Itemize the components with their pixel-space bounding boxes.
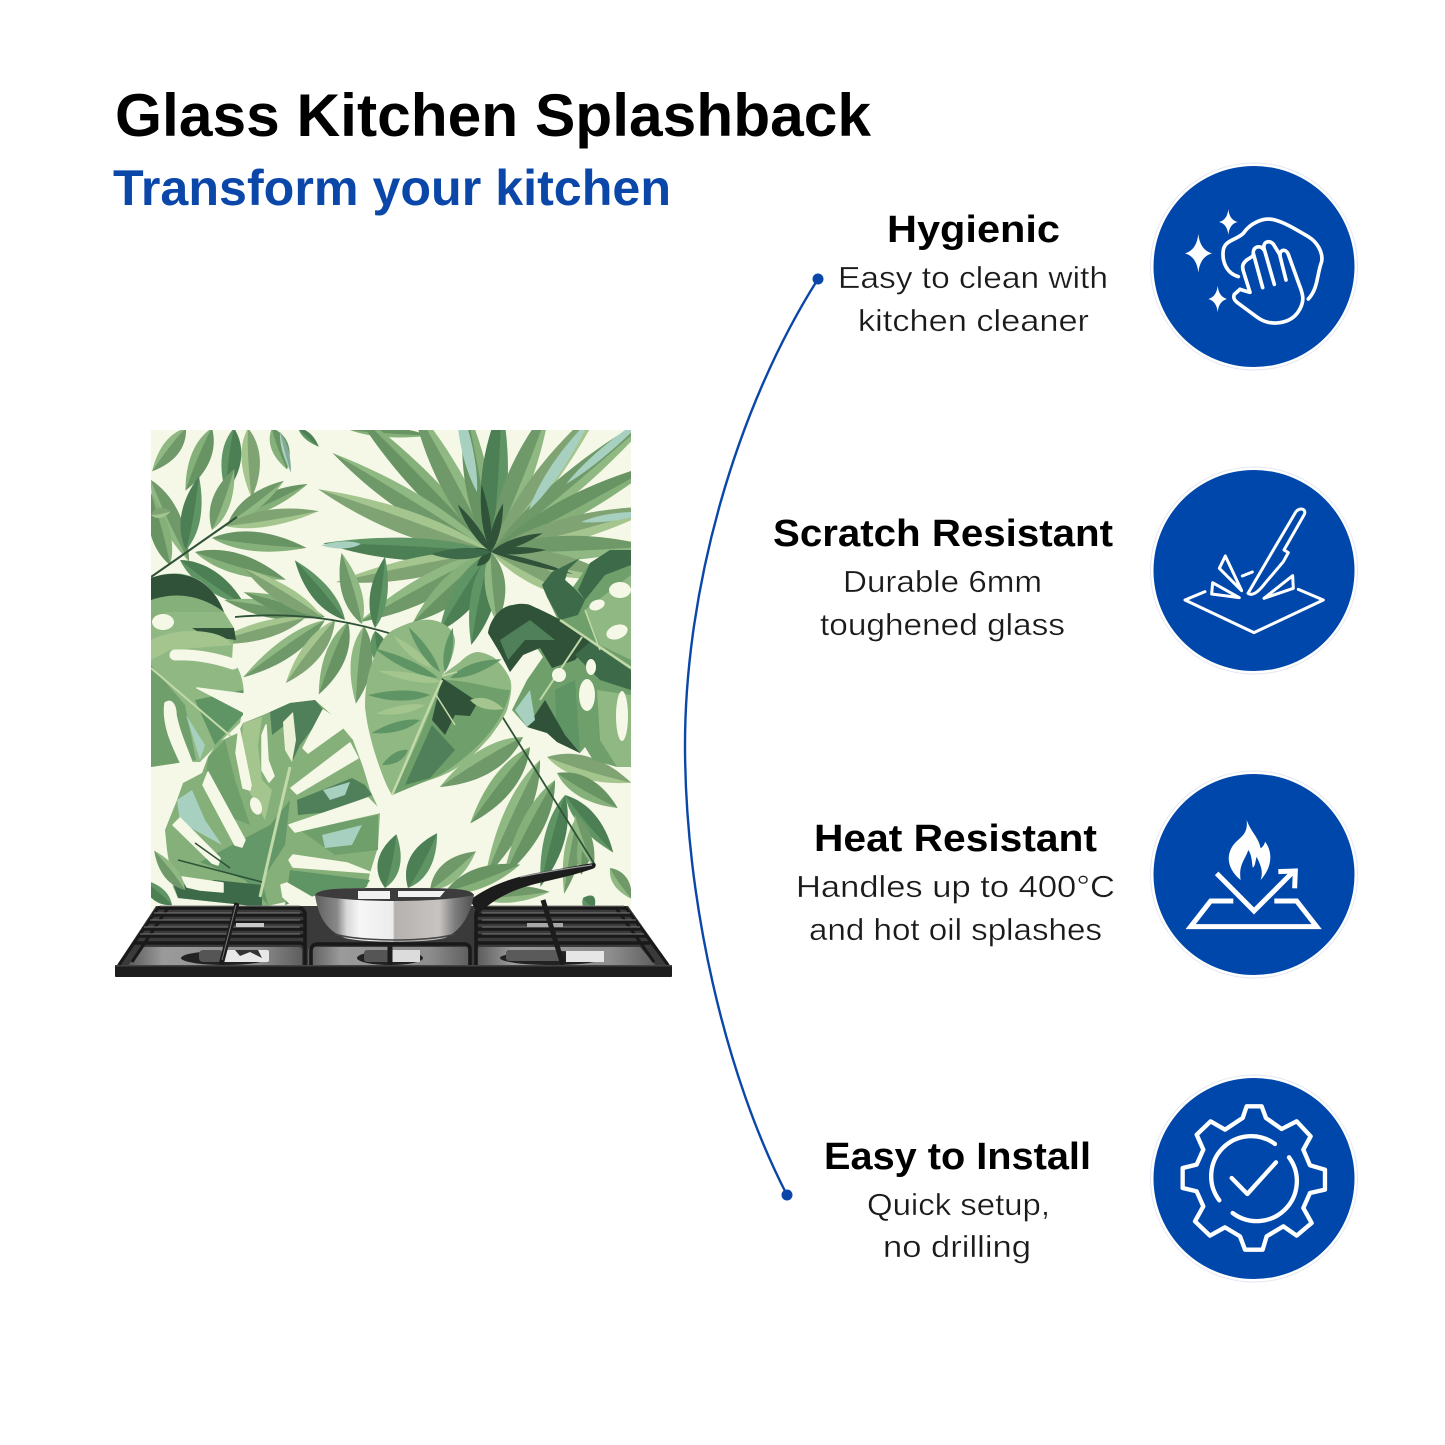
icon: hand wiping (1150, 163, 1358, 370)
big monstera (165, 700, 382, 910)
feature: Easy to Install: Quick setup, (867, 1187, 1050, 1222)
icon: flame and heat (1150, 771, 1358, 978)
grates (119, 908, 668, 966)
monstera right (488, 550, 631, 767)
feature: Hygienic: kitchen cleaner (858, 303, 1089, 338)
feature: Scratch Resistant: toughened glass (820, 607, 1065, 642)
feature: Easy to Install (824, 1136, 1091, 1264)
palm frond left (151, 469, 319, 600)
feature: Heat Resistant: and hot oil splashes (809, 912, 1102, 947)
burner panes (128, 947, 656, 966)
fan palm (318, 430, 631, 645)
palm frond middle (224, 553, 390, 704)
feature: Heat Resistant (796, 818, 1115, 947)
gas cooktop (115, 900, 672, 977)
feature: Scratch Resistant: Durable 6mm (843, 564, 1042, 599)
feature: Easy to Install: no drilling (883, 1229, 1031, 1264)
monstera left (151, 573, 244, 768)
heart leaf (365, 620, 511, 795)
feature: Heat Resistant: Heat Resistant (814, 818, 1097, 860)
feature: Hygienic: Hygienic (887, 209, 1060, 251)
icon: gear with check (1150, 1075, 1358, 1282)
burners (181, 923, 604, 965)
subtitle: Transform your kitchen (113, 160, 671, 216)
feature: Hygienic (838, 209, 1108, 338)
base bar (115, 965, 672, 977)
palm frond lower right (373, 713, 638, 912)
feature: Easy to Install: Easy to Install (824, 1136, 1091, 1178)
feature: Scratch Resistant: Scratch Resistant (773, 513, 1113, 555)
frying pan (315, 863, 596, 942)
title: Glass Kitchen Splashback (115, 82, 872, 149)
splashback panel with tropical leaves (151, 430, 631, 910)
feature: Scratch Resistant (773, 513, 1113, 642)
connector curve (685, 274, 824, 1200)
feature: Hygienic: Easy to clean with (838, 260, 1108, 295)
icon: knife on glass (1150, 467, 1358, 674)
top edge leaflets (151, 430, 420, 561)
feature: Heat Resistant: Handles up to 400°C (796, 869, 1115, 904)
